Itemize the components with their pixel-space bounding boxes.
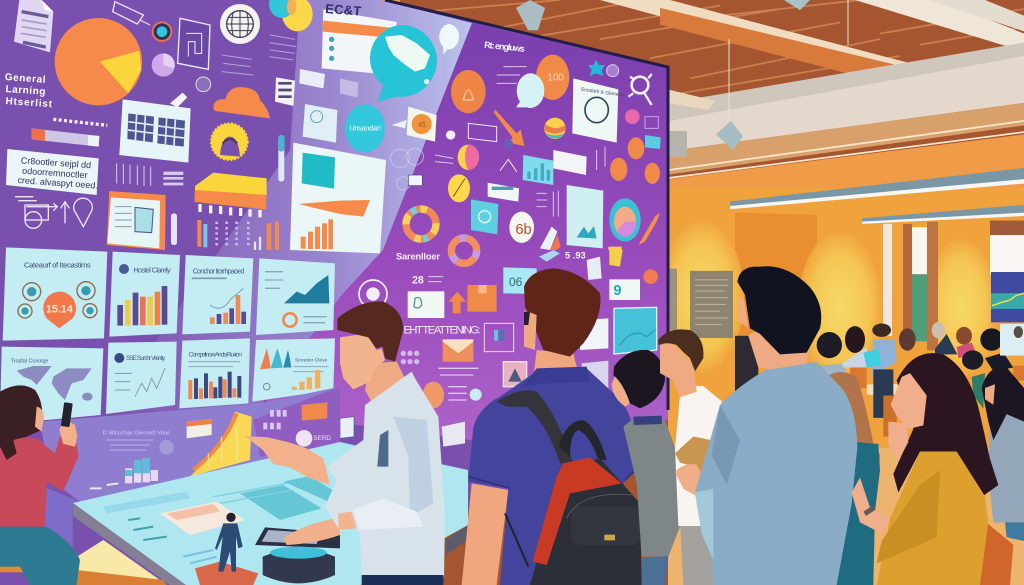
pale bubble xyxy=(516,73,544,108)
lower left caption: 28 xyxy=(412,275,424,287)
panel: bars xyxy=(179,338,250,408)
cyan circle label xyxy=(345,104,385,152)
panel: peaks and steps: Sovetinr Cleve xyxy=(295,358,328,364)
calendar grids panel xyxy=(119,93,191,163)
3D block xyxy=(194,173,267,217)
jeans xyxy=(0,527,80,585)
hair xyxy=(613,350,665,408)
lower wall band xyxy=(40,387,340,560)
lower wall band: SERD xyxy=(313,435,331,442)
dotted row xyxy=(53,119,107,125)
panel: area chart xyxy=(256,258,335,335)
notice boards xyxy=(668,269,733,338)
lower wall band: D Sitnorfuar Glenseb Vrios xyxy=(103,430,170,436)
shirt xyxy=(695,362,857,585)
panel: combo chart xyxy=(182,255,253,334)
person: man with dark hair and blue shirt xyxy=(675,266,880,585)
left upper graphics xyxy=(4,0,397,253)
body xyxy=(623,418,680,557)
person: student with backpack xyxy=(462,268,642,585)
near arm xyxy=(462,483,508,585)
text note card: odoorremnoctler xyxy=(22,166,88,180)
hands with basket xyxy=(675,437,712,496)
ear and glasses xyxy=(524,310,537,350)
globe icon xyxy=(220,4,260,44)
shirt shading xyxy=(712,405,740,485)
card with orange circle: ง1 xyxy=(418,120,426,129)
cards row: 06 xyxy=(509,275,523,289)
decorative balls xyxy=(448,118,566,202)
doc card with orange border xyxy=(107,191,166,250)
screen: purple surface xyxy=(0,0,668,585)
white panel with ring xyxy=(572,78,624,143)
control puck xyxy=(263,547,335,583)
lower left caption xyxy=(396,251,443,287)
shirt xyxy=(468,368,640,585)
neck xyxy=(365,362,405,405)
text note card: cred. alvaspyt oeed. xyxy=(17,175,98,191)
diagonal tiles xyxy=(540,227,622,250)
shirt fold shading xyxy=(353,417,433,530)
face xyxy=(340,333,385,389)
heading: Htserlist xyxy=(5,96,53,110)
small icons xyxy=(113,2,211,92)
text note card xyxy=(6,149,99,195)
cyan charts and cards xyxy=(471,135,661,234)
heading: Rt: engluws xyxy=(484,40,525,54)
envelope and small tiles xyxy=(340,323,527,447)
cards row xyxy=(408,250,658,393)
collar xyxy=(523,367,590,387)
white panel with ring: Snodark & Glonwrs xyxy=(580,87,624,99)
person: man with white shirt xyxy=(245,302,445,585)
neck xyxy=(533,350,580,380)
jeans xyxy=(362,575,443,585)
large light document xyxy=(290,143,386,253)
panel: bar chart: Hostel Clarely xyxy=(133,265,171,274)
floor and bench xyxy=(0,540,167,585)
segmented ring xyxy=(406,209,436,239)
lines xyxy=(435,67,605,217)
upper right graphics xyxy=(340,24,661,250)
miniature figure on block xyxy=(195,513,258,585)
tee xyxy=(675,386,722,526)
projector and spotlights xyxy=(516,0,848,157)
heading xyxy=(4,72,53,110)
small card xyxy=(340,78,358,97)
pointing arm xyxy=(245,436,330,485)
notes xyxy=(222,35,296,75)
wall monitor xyxy=(991,272,1024,322)
person: boy in grey shirt xyxy=(612,350,680,585)
orange icon circles xyxy=(451,55,569,113)
pie chart xyxy=(55,18,142,105)
cloud xyxy=(213,87,270,118)
cyan circle label: Unsandar! xyxy=(349,124,381,133)
hair xyxy=(737,266,821,354)
heading: General xyxy=(4,72,46,86)
card with orange circle xyxy=(392,107,437,142)
screen frame edge xyxy=(385,0,668,410)
panel: categories with bubble: Cateaurf of Itecastims xyxy=(24,260,91,269)
pale poster xyxy=(567,185,603,248)
orange wall xyxy=(660,188,1024,585)
person: woman in yellow jacket xyxy=(852,353,1024,585)
ceiling beams xyxy=(600,0,1024,121)
table side edge xyxy=(73,503,186,585)
head xyxy=(612,370,630,407)
orange dots xyxy=(610,137,660,184)
small white bubble xyxy=(439,24,459,55)
orange bag xyxy=(975,519,1013,585)
document icon xyxy=(14,0,53,52)
neck and ear xyxy=(748,328,810,369)
panel: categories with bubble xyxy=(3,247,107,341)
oval icon xyxy=(509,212,534,243)
screen: light wedge xyxy=(100,0,472,420)
hair xyxy=(337,302,403,362)
sweater xyxy=(0,437,78,527)
hanging light bars xyxy=(730,168,1024,224)
ceiling soffit band xyxy=(668,56,1024,221)
cyan speech bubble xyxy=(370,25,437,102)
backpack xyxy=(497,390,642,585)
sleeve hem xyxy=(468,467,639,488)
hand and phone xyxy=(59,402,77,447)
icon tube xyxy=(278,135,284,182)
table top xyxy=(73,442,468,585)
tablet xyxy=(255,527,340,548)
person: young man in white tee xyxy=(658,329,722,585)
pants xyxy=(680,522,713,585)
panel: peaks and steps xyxy=(252,338,335,402)
raised hands xyxy=(852,422,908,534)
overlapping circles xyxy=(269,0,313,31)
right side tiny cards xyxy=(275,69,337,143)
checklist card xyxy=(322,9,397,75)
woman behind him xyxy=(827,372,880,585)
panel: world map xyxy=(0,347,103,422)
hand xyxy=(338,512,357,530)
face xyxy=(660,341,697,397)
lower right graphics xyxy=(340,238,658,447)
floor plan outline xyxy=(178,18,210,69)
panel: bars: Compelinow Anda Ruxion xyxy=(189,351,242,358)
icons xyxy=(446,60,658,172)
panel: combo chart: Conchor Itorrhpaoed xyxy=(193,268,244,275)
big wall slogan: EHT TEATTENING: xyxy=(403,324,481,336)
oval icon: 6b xyxy=(515,222,532,238)
woman right background xyxy=(982,367,1024,541)
pencil xyxy=(638,213,660,245)
arrow xyxy=(494,109,524,146)
status bar xyxy=(32,128,99,147)
panel: line chart: SSE Surshr Vrenity xyxy=(126,355,166,362)
text note card: Cr8ootler sejpl dd xyxy=(21,155,91,170)
cards row: 5 .93 xyxy=(565,251,586,261)
sunburst icon xyxy=(211,123,248,160)
circle overlay outlines xyxy=(391,148,423,190)
background crowd xyxy=(735,322,1024,437)
dashboard panels xyxy=(0,247,340,560)
chart guidelines xyxy=(117,163,183,186)
main display wall xyxy=(0,0,668,585)
lower left caption: Sarenlloer xyxy=(396,251,440,261)
interactive table xyxy=(0,442,468,585)
pillars and windows xyxy=(883,221,1024,350)
floor xyxy=(668,448,1024,585)
typing hand xyxy=(283,517,340,545)
cards row: 9 xyxy=(613,283,621,299)
panel: line chart xyxy=(106,342,177,414)
apple ring icon xyxy=(359,280,387,308)
ring lower xyxy=(451,238,477,263)
hair xyxy=(524,268,600,357)
face xyxy=(891,373,927,429)
jeans xyxy=(642,556,668,585)
shirt xyxy=(325,372,445,578)
panel: world map: Tropfal Conolge xyxy=(11,359,48,365)
panel: categories with bubble: 15.14 xyxy=(46,303,73,315)
table UI cards xyxy=(103,476,340,563)
orange icon circles: 100 xyxy=(547,73,564,84)
person: woman with phone xyxy=(0,385,80,585)
heading: Larning xyxy=(5,84,46,98)
panel: bar chart xyxy=(109,252,180,337)
jacket xyxy=(877,451,988,585)
hair xyxy=(658,329,703,371)
donut chart xyxy=(609,198,641,242)
mini charts xyxy=(171,213,279,250)
hair xyxy=(0,385,42,460)
hair back xyxy=(893,353,998,498)
table right edge xyxy=(445,525,468,555)
room background xyxy=(400,0,1024,585)
outline icons xyxy=(15,197,92,228)
yellow curve chart xyxy=(190,412,252,477)
wall header: EC&T xyxy=(325,1,362,19)
screen: right purple zone xyxy=(258,23,668,440)
